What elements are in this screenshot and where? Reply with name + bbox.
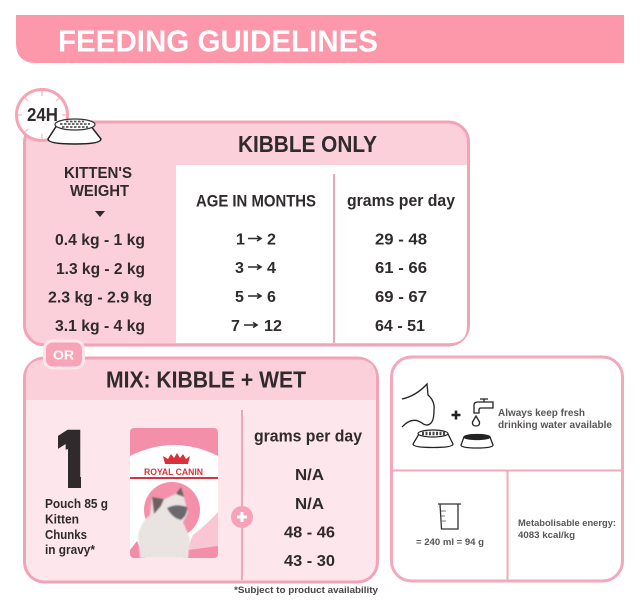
column: grams per day: 64 - 51 <box>375 318 425 335</box>
water reminder text: drinking water available <box>498 420 612 431</box>
column: age in months: 4 <box>267 260 276 277</box>
column: kitten's weight: 2.3 kg - 2.9 kg <box>48 290 152 306</box>
column: kitten's weight: 3.1 kg - 4 kg <box>55 318 145 335</box>
icon: water tap and bowl <box>461 399 493 448</box>
pouch description: Kitten <box>45 512 79 526</box>
icon: kibble bowl small <box>413 430 453 448</box>
column: age in months <box>196 192 316 335</box>
plus sign <box>452 410 460 420</box>
column: age in months: 5 <box>235 289 244 306</box>
heading: kibble only: KIBBLE ONLY <box>238 131 377 157</box>
icon: kibble bowl <box>48 119 101 144</box>
metabolisable energy text <box>518 518 616 541</box>
brand: ROYAL CANIN <box>144 467 203 478</box>
column: kitten's weight <box>48 165 152 335</box>
column: kitten's weight: KITTEN'S <box>64 165 132 182</box>
large number 1: 1 <box>48 415 94 505</box>
column: age in months: 6 <box>267 289 276 306</box>
column: kitten's weight: 0.4 kg - 1 kg <box>55 232 145 249</box>
metabolisable energy text: Metabolisable energy: <box>518 518 616 529</box>
column: kitten's weight: 1.3 kg - 2 kg <box>56 261 145 278</box>
panel: mix kibble + wet <box>24 358 378 582</box>
pouch description <box>45 497 108 557</box>
icon: 24h clock: 24H <box>27 105 58 125</box>
water reminder text: Always keep fresh <box>498 408 585 419</box>
icon: measuring cup <box>438 504 461 529</box>
heading: mix kibble + wet: MIX: KIBBLE + WET <box>106 366 306 392</box>
column: age in months: 3 <box>235 260 244 277</box>
column: mix grams per day: N/A <box>295 467 324 484</box>
pouch description: Chunks <box>45 528 87 542</box>
column: kitten's weight: WEIGHT <box>70 183 129 200</box>
column: mix grams per day <box>254 428 363 570</box>
cup measure text: = 240 ml = 94 g <box>416 537 484 548</box>
footnote: *Subject to product availability <box>234 585 379 596</box>
title banner <box>16 15 624 63</box>
column: age in months: 7 <box>231 318 240 335</box>
column: age in months: AGE IN MONTHS <box>196 192 316 210</box>
pouch description: in gravy* <box>45 543 95 557</box>
column: mix grams per day: 43 - 30 <box>284 553 335 570</box>
column: grams per day: 69 - 67 <box>375 289 427 306</box>
crown <box>163 453 190 464</box>
column: grams per day: 61 - 66 <box>375 260 427 277</box>
product pouch <box>130 428 218 558</box>
or badge <box>44 341 84 368</box>
icon: cat eating <box>402 384 434 427</box>
column: mix grams per day: grams per day <box>254 428 363 446</box>
column: grams per day: grams per day <box>347 192 456 210</box>
icon: 24h clock <box>16 90 68 140</box>
column: mix grams per day: N/A <box>295 496 324 513</box>
column: grams per day <box>347 192 456 335</box>
kitten photo <box>138 487 190 558</box>
column: age in months: 12 <box>264 318 282 335</box>
column: grams per day: 29 - 48 <box>375 232 427 248</box>
pouch description: Pouch 85 g <box>45 497 108 511</box>
plus badge <box>231 506 253 528</box>
column: mix grams per day: 48 - 46 <box>284 524 335 542</box>
or badge: OR <box>53 348 75 362</box>
title: FEEDING GUIDELINES <box>58 24 378 58</box>
panel: extra information <box>392 357 622 581</box>
metabolisable energy text: 4083 kcal/kg <box>518 530 575 541</box>
column: age in months: 1 <box>236 232 245 248</box>
panel: kibble only <box>24 122 468 345</box>
water reminder text <box>498 408 612 431</box>
column: age in months: 2 <box>267 232 276 248</box>
